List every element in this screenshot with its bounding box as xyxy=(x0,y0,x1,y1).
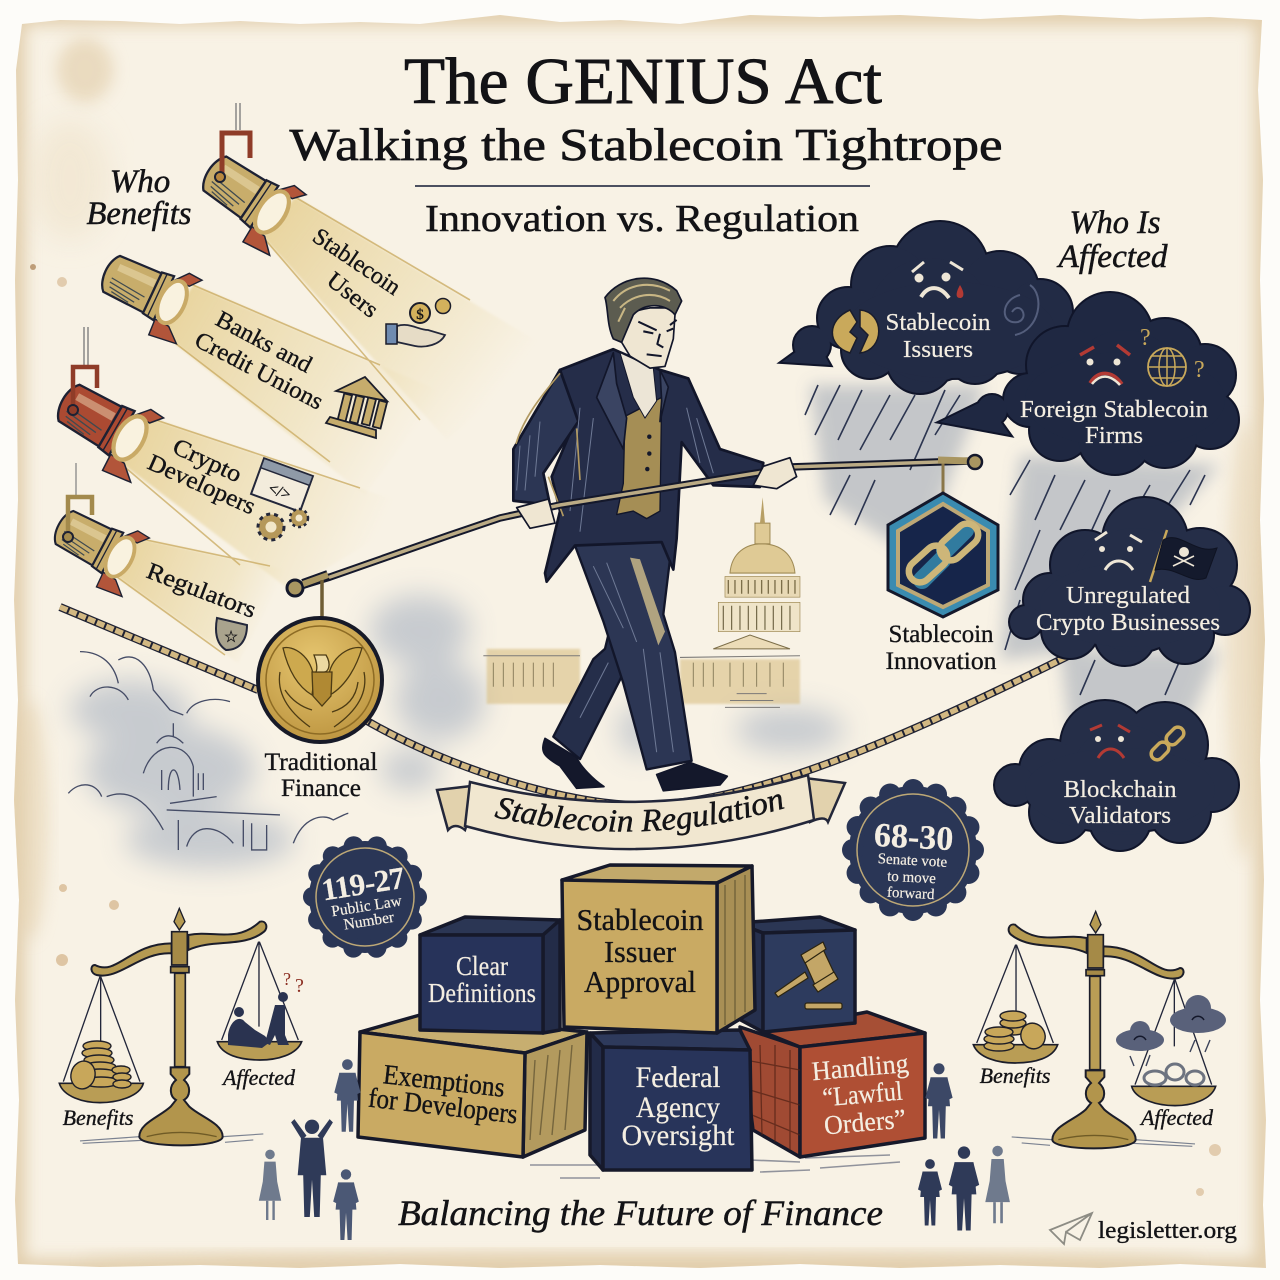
icon: hand with coins xyxy=(386,298,450,347)
icon: people in pan: ? xyxy=(283,969,291,989)
head xyxy=(620,308,675,368)
right rain xyxy=(805,385,1220,730)
label: foreign stablecoin firms: Foreign Stablecoin xyxy=(1020,397,1208,423)
seal: senate vote: Senate vote xyxy=(877,851,948,871)
label: benefits right: Benefits xyxy=(980,1063,1050,1088)
main title: The GENIUS Act xyxy=(404,45,882,118)
title block xyxy=(290,45,1003,240)
heading: who is affected xyxy=(1056,205,1168,275)
label: stablecoin issuer approval xyxy=(576,902,704,999)
icon: bank xyxy=(326,377,387,438)
label: stablecoin users: Stablecoin xyxy=(308,223,405,301)
label: stablecoin issuers: Stablecoin xyxy=(886,310,990,336)
label: handling lawful orders: “Lawful xyxy=(821,1076,904,1112)
icon: eagle seal xyxy=(279,647,365,727)
label: banks and credit unions: Banks and xyxy=(211,306,316,379)
label: exemptions for developers: for Developers xyxy=(367,1083,519,1130)
tightrope walker figure xyxy=(297,278,972,791)
spotlight: regulators xyxy=(41,463,260,650)
cloud: foreign stablecoin firms xyxy=(940,293,1238,474)
label: clear definitions: Definitions xyxy=(428,978,536,1008)
block: handling lawful orders xyxy=(740,1012,925,1157)
crowd left xyxy=(259,1059,361,1240)
label: stablecoin issuers: Issuers xyxy=(903,337,973,363)
label: regulators: Regulators xyxy=(143,558,260,624)
label: stablecoin issuer approval: Stablecoin xyxy=(576,902,704,937)
label: foreign stablecoin firms: Firms xyxy=(1085,423,1143,449)
icon: storm and chain in pan xyxy=(1116,995,1226,1085)
icon: face and pirate flag xyxy=(1095,530,1217,582)
credit: legisletter: legisletter.org xyxy=(1098,1218,1237,1244)
credit: legisletter xyxy=(1050,1213,1237,1244)
left arm xyxy=(513,370,578,505)
shoes xyxy=(543,738,727,791)
label: stablecoin innovation xyxy=(886,621,997,675)
seal: public law number: Number xyxy=(342,909,396,934)
heading: who is affected: Who Is xyxy=(1070,205,1160,241)
tagline: Innovation vs. Regulation xyxy=(425,198,859,240)
icon: worried face with globe: ? xyxy=(1140,325,1151,351)
balance pole xyxy=(297,461,972,587)
seal: senate vote: to move xyxy=(887,869,937,887)
label: affected right: Affected xyxy=(1139,1105,1214,1130)
label: stablecoin innovation: Stablecoin xyxy=(888,621,994,648)
front leg xyxy=(575,532,692,769)
icon: coins in pan xyxy=(984,1011,1049,1053)
cloud: blockchain validators xyxy=(995,701,1238,850)
heading: who benefits xyxy=(86,164,192,232)
seal: senate vote: forward xyxy=(887,885,935,903)
label: unregulated crypto businesses: Crypto Businesses xyxy=(1036,610,1220,636)
label: benefits left: Benefits xyxy=(63,1105,133,1130)
vest and cravat xyxy=(617,397,662,519)
label: federal agency oversight: Oversight xyxy=(622,1119,735,1152)
seal: public law number: Public Law xyxy=(330,892,404,920)
watercolor clouds and city xyxy=(68,595,845,868)
label: traditional finance: Traditional xyxy=(264,749,378,776)
cloud: unregulated crypto businesses xyxy=(1010,498,1249,665)
icon: chain link xyxy=(904,519,983,587)
subtitle: Walking the Stablecoin Tightrope xyxy=(290,119,1003,170)
spotlight: stablecoin users xyxy=(186,103,450,347)
icon: paper plane xyxy=(1050,1213,1092,1244)
label: stablecoin issuer approval: Approval xyxy=(584,964,696,999)
coin: traditional finance xyxy=(258,618,382,802)
spotlight: banks and credit unions xyxy=(89,241,387,438)
seal: senate vote xyxy=(849,786,977,914)
icon: worried face with globe: ? xyxy=(1194,357,1205,383)
icon: code window and gears: </> xyxy=(266,480,293,504)
label: handling lawful orders xyxy=(811,1048,915,1141)
label: stablecoin issuer approval: Issuer xyxy=(604,934,677,969)
label: affected left: Affected xyxy=(221,1065,296,1090)
seal: public law number: 119-27 xyxy=(319,860,407,907)
icon: shield xyxy=(216,618,247,650)
block: stablecoin issuer approval xyxy=(562,865,755,1033)
block: exemptions for developers xyxy=(358,1015,587,1157)
label: stablecoin issuers xyxy=(886,310,990,363)
icon: worried face xyxy=(912,262,963,298)
label: traditional finance: Finance xyxy=(281,775,361,802)
ribbon banner: stablecoin regulation: Stablecoin Regulation xyxy=(494,794,784,836)
label: unregulated crypto businesses xyxy=(1036,583,1220,636)
label: federal agency oversight: Federal xyxy=(636,1061,720,1094)
label: clear definitions: Clear xyxy=(456,951,508,981)
label: blockchain validators: Blockchain xyxy=(1064,777,1176,803)
label: exemptions for developers xyxy=(367,1059,519,1130)
seal: public law number xyxy=(309,841,421,953)
hands xyxy=(517,458,797,528)
label: traditional finance xyxy=(264,749,378,802)
label: crypto developers: Developers xyxy=(144,450,259,520)
label: blockchain validators: Validators xyxy=(1069,803,1171,829)
ground hatching under blocks xyxy=(530,1155,900,1178)
hexagon: stablecoin innovation xyxy=(886,455,998,675)
label: stablecoin users: Users xyxy=(321,267,383,323)
icon: worried face with globe xyxy=(1080,325,1205,386)
spotlight beams xyxy=(113,197,552,663)
tagline: balancing the future of finance: Balancing the Future of Finance xyxy=(398,1193,883,1233)
label: clear definitions xyxy=(428,951,536,1008)
block: gavel xyxy=(737,917,855,1032)
icon: shield: ☆ xyxy=(224,629,238,646)
icon: people in pan xyxy=(228,969,304,1048)
ribbon banner: stablecoin regulation xyxy=(436,774,847,850)
label: blockchain validators xyxy=(1064,777,1176,829)
label: handling lawful orders: Handling xyxy=(811,1048,910,1086)
seal: senate vote: 68-30 xyxy=(873,817,954,858)
icon: gavel xyxy=(775,942,842,1009)
icon: coin stacks xyxy=(68,1041,131,1092)
label: handling lawful orders: Orders” xyxy=(823,1103,907,1140)
label: stablecoin innovation: Innovation xyxy=(886,648,997,675)
label: federal agency oversight xyxy=(622,1061,735,1152)
pole end left xyxy=(287,575,328,634)
heading: who is affected: Affected xyxy=(1056,239,1168,275)
right balance scale xyxy=(973,911,1226,1148)
block: federal agency oversight xyxy=(590,1030,752,1170)
block: clear definitions xyxy=(420,917,560,1033)
label: crypto developers: Crypto xyxy=(168,434,246,488)
capitol building xyxy=(483,497,800,707)
crowd right xyxy=(918,1063,1010,1230)
label: unregulated crypto businesses: Unregulated xyxy=(1066,583,1190,609)
heading: who benefits: Benefits xyxy=(86,196,192,232)
icon: hand with coins: $ xyxy=(416,307,424,323)
jacket xyxy=(545,349,763,582)
icon: code window and gears xyxy=(251,458,313,540)
icon: face and broken chain xyxy=(1090,725,1186,762)
heading: who benefits: Who xyxy=(110,164,170,200)
left balance scale xyxy=(59,908,304,1145)
icon: people in pan: ? xyxy=(295,975,304,997)
tightrope xyxy=(60,607,1080,805)
back leg xyxy=(553,563,653,759)
label: exemptions for developers: Exemptions xyxy=(382,1059,506,1104)
label: foreign stablecoin firms xyxy=(1020,397,1208,449)
spotlight: crypto developers xyxy=(42,327,313,540)
icon: broken coin xyxy=(832,310,879,353)
label: banks and credit unions: Credit Unions xyxy=(190,327,327,415)
label: federal agency oversight: Agency xyxy=(636,1091,720,1124)
cloud: stablecoin issuers xyxy=(782,222,1072,393)
